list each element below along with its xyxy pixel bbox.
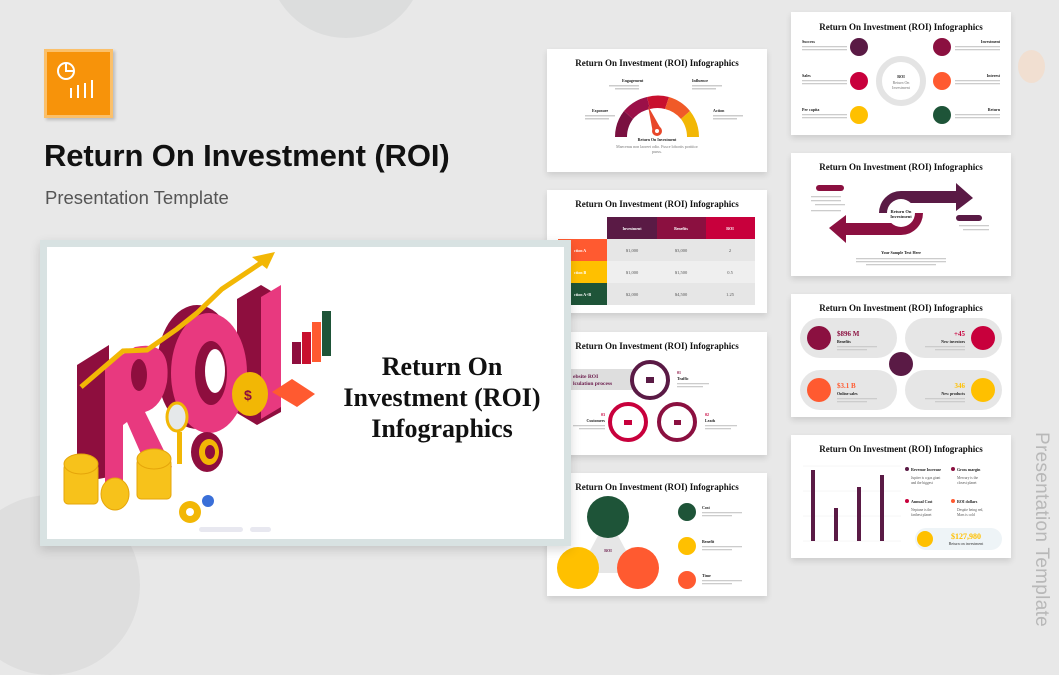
slide: table: 2 [729, 248, 731, 253]
icon: orange chart app [44, 49, 113, 118]
slide: pills: Benefits [837, 339, 851, 344]
slide: table: $1,000 [626, 270, 639, 276]
slide: bar chart: Revenue Increase [911, 467, 941, 472]
slide: circles process: Customers [587, 418, 605, 423]
slide: six circles: Return On Investment (ROI) Infographics [819, 22, 983, 32]
slide: table: $3,000 [675, 248, 688, 254]
slide: bar chart: Jupiter is a gas giant [911, 476, 940, 480]
slide: bar chart: Neptune is the [911, 508, 932, 512]
slide: gauge [547, 49, 767, 172]
slide: pills: $896 M [837, 330, 860, 338]
main slide heading: Infographics [371, 414, 513, 443]
vertical text: Presentation Template [1031, 432, 1052, 627]
slide: pills: New products [941, 391, 965, 396]
slide: pills [791, 294, 1011, 417]
slide: table: 0.5 [727, 270, 734, 275]
decorative peach icon [1018, 50, 1045, 83]
slide: bar chart: Gross margin [957, 467, 981, 472]
illustration: ROI 3D letters: $ [244, 387, 252, 403]
slide: bar chart: Annual Cost [911, 499, 933, 504]
slide: table: 1.25 [726, 292, 735, 297]
slide: triangle circles: Benefit [702, 539, 715, 544]
slide: six circles: Return [988, 107, 1001, 112]
slide: table: $4,500 [675, 292, 688, 298]
title: Return On Investment (ROI) [44, 138, 450, 173]
slide: gauge: purus. [652, 149, 662, 154]
slide: table [547, 190, 767, 313]
slide: table: ction A [574, 248, 586, 253]
slide: circles process: Leads [705, 418, 716, 423]
slide: bar chart [791, 435, 1011, 558]
slide: triangle circles [547, 473, 767, 596]
slide: pills: $3.1 B [837, 382, 856, 390]
slide: gauge: Maecenas non laoreet odio. Fusce lobortis porttitor [616, 144, 698, 149]
slide: bar chart: Mercury is the [957, 476, 978, 480]
main slide heading: Investment (ROI) [343, 383, 541, 412]
slide: bar chart: farthest planet [911, 513, 931, 517]
slide: circles process: 02 [705, 412, 709, 417]
slide: table: $2,000 [626, 292, 639, 298]
slide: six circles [791, 12, 1011, 135]
slide: pills: +45 [954, 330, 965, 338]
slide: gauge: Engagement [622, 78, 644, 83]
slide: arrows [791, 153, 1011, 276]
main slide heading [343, 352, 541, 443]
slide: pills: 346 [954, 382, 966, 390]
slide: table: Return On Investment (ROI) Infographics [575, 199, 739, 209]
illustration: ROI 3D letters [64, 252, 331, 532]
slide: gauge: Exposure [592, 108, 608, 113]
slide: pills: New investors [941, 339, 965, 344]
slide: bar chart: closest planet [957, 481, 976, 485]
main slide heading: Return On [382, 352, 502, 381]
slide: bar chart: and the biggest [911, 481, 933, 485]
slide: arrows: Investment [890, 214, 912, 219]
slide: gauge: Influence [692, 78, 708, 83]
slide: bar chart: $127,980 [951, 532, 981, 541]
slide: gauge: Return On Investment (ROI) Infographics [575, 58, 739, 68]
slide: circles process: ebsite ROI [573, 374, 598, 380]
slide: table: Benefits [674, 226, 688, 231]
slide: bar chart: Mars is cold [957, 513, 975, 517]
slide: triangle circles: ROI [604, 548, 612, 553]
slide: six circles: Investment [892, 85, 911, 90]
slide: table: Investment [622, 226, 642, 231]
slide: pills: Return On Investment (ROI) Infographics [819, 303, 983, 313]
slide: triangle circles: Return On Investment (ROI) Infographics [575, 482, 739, 492]
slide: triangle circles: Cost [702, 505, 710, 510]
slide: six circles: Sales [802, 73, 811, 78]
subtitle: Presentation Template [45, 187, 229, 208]
slide: pills: Online sales [837, 391, 858, 396]
slide: table: ROI [726, 226, 734, 231]
slide: gauge: Return On Investment [638, 137, 677, 142]
slide: circles process: Traffic [677, 376, 689, 381]
slide: arrows: Return On Investment (ROI) Infographics [819, 162, 983, 172]
slide: bar chart: Return on investment [949, 541, 984, 546]
slide: triangle circles: Time [702, 573, 711, 578]
slide: gauge: Action [713, 108, 725, 113]
background circle bottom left [0, 495, 140, 675]
slide: arrows: Your Sample Text Here [881, 250, 921, 255]
slide: circles process: lculation process [573, 381, 612, 387]
slide: six circles: Per capita [802, 107, 819, 112]
slide: table: $1,500 [675, 270, 688, 276]
slide: circles process: 01 [677, 370, 681, 375]
slide: circles process [547, 332, 767, 455]
slide: bar chart: Despite being red, [957, 508, 983, 513]
slide: six circles: ROI [897, 74, 905, 79]
main slide preview [40, 240, 571, 546]
slide: six circles: Interest [987, 73, 1001, 78]
slide: circles process: Return On Investment (ROI) Infographics [575, 341, 739, 351]
slide: table: ction A+B [574, 292, 591, 297]
slide: table: ction B [574, 270, 586, 275]
slide: bar chart: Return On Investment (ROI) Infographics [819, 444, 983, 454]
slide: six circles: Investment [981, 39, 1001, 44]
slide: six circles: Success [802, 39, 815, 44]
background circle top [268, 0, 424, 38]
slide: table: $1,000 [626, 248, 639, 254]
slide: circles process: 03 [601, 412, 605, 417]
slide: bar chart: ROI dollars [957, 499, 978, 504]
slide: six circles: Return On [893, 80, 909, 85]
slide: arrows: Return On [891, 209, 912, 214]
